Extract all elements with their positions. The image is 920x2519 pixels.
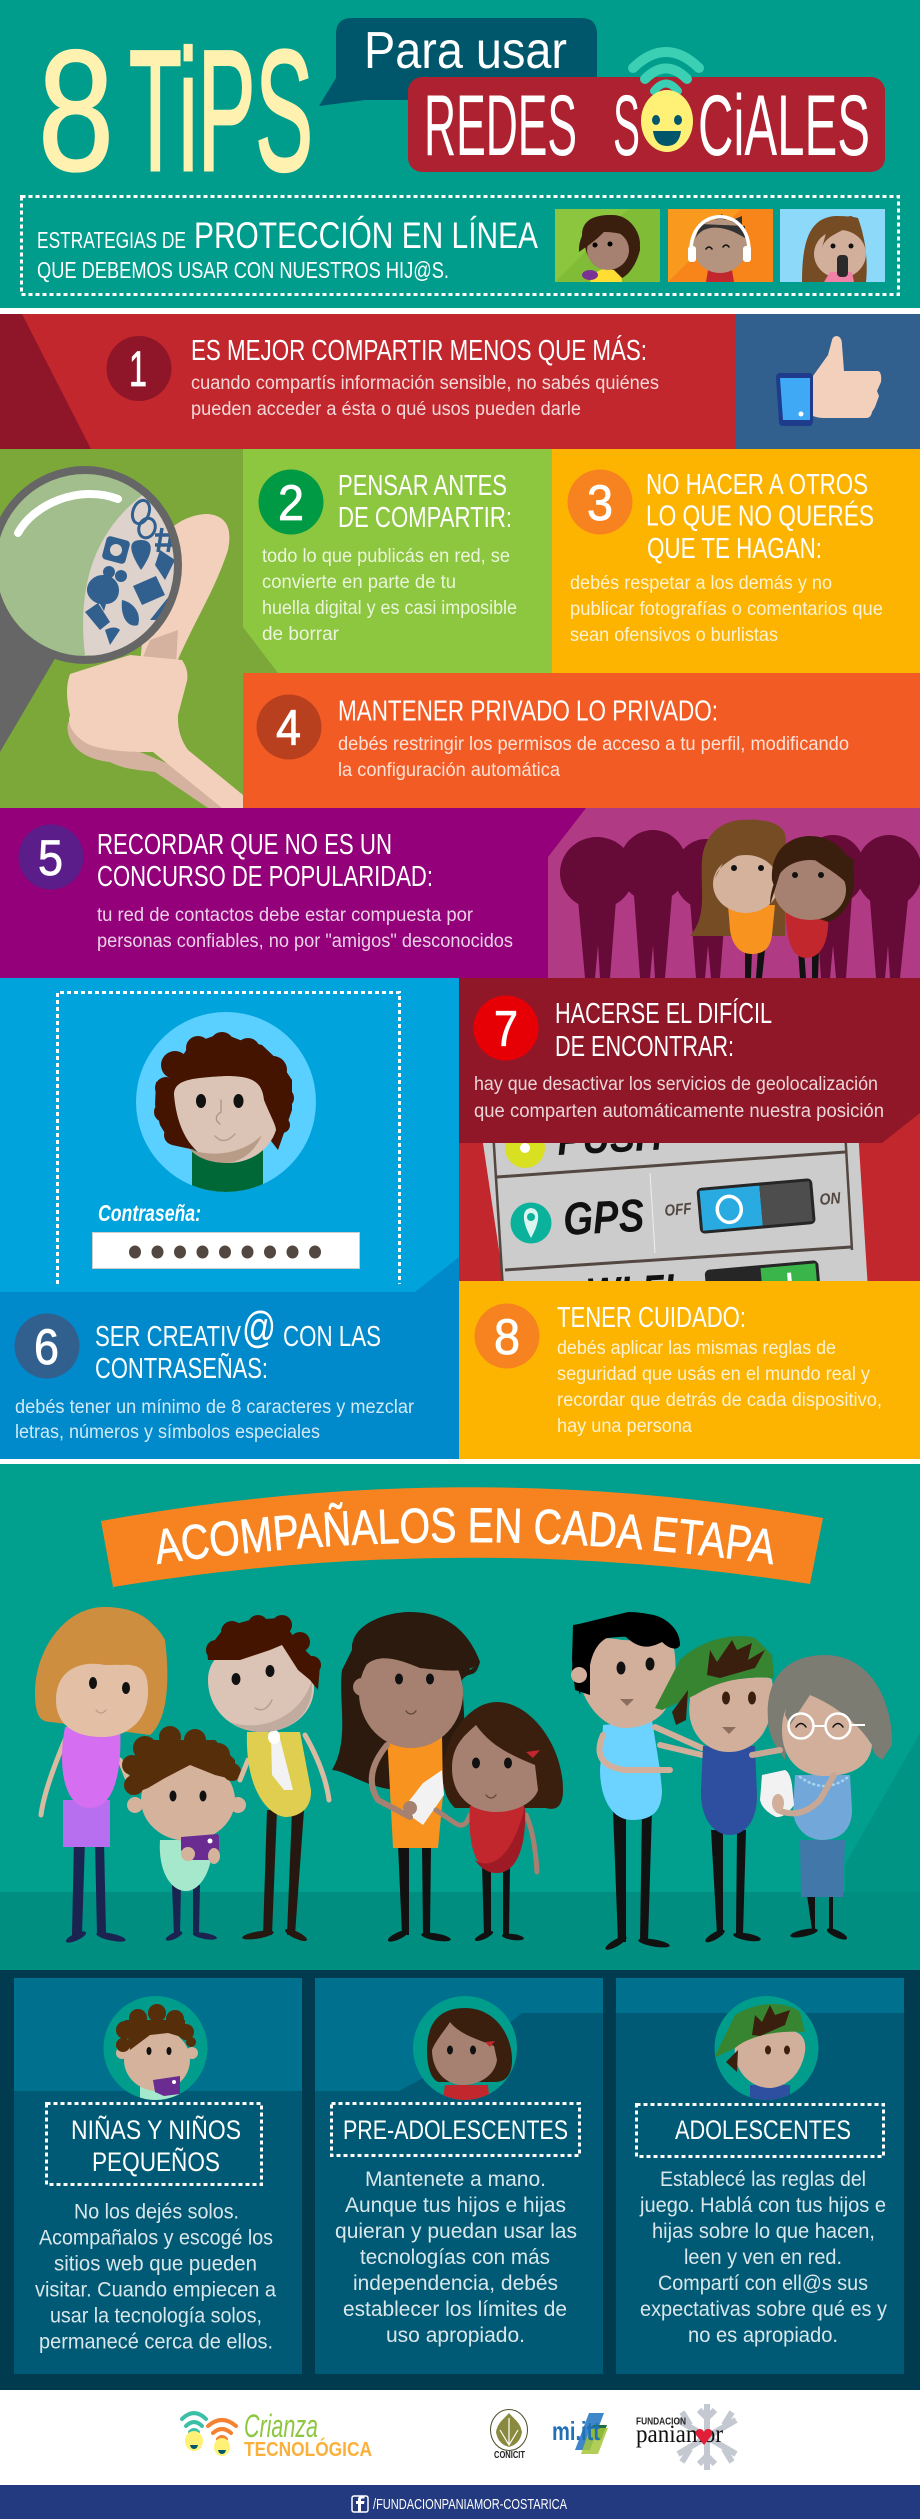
heading 7 bbox=[555, 997, 772, 1063]
heading 5: RECORDAR QUE NO ES UN bbox=[97, 829, 392, 861]
logo: conicit: CONICIT bbox=[494, 2450, 525, 2461]
card: pre-adolescentes bbox=[315, 1978, 603, 2374]
number 2: 2 bbox=[278, 475, 304, 531]
stage label box bbox=[46, 2104, 262, 2184]
illustration: settings device with GPS switch: PUSH bbox=[556, 1111, 664, 1165]
card text: leen y ven en red. bbox=[684, 2246, 842, 2269]
family illustration bbox=[35, 1607, 892, 1952]
card text: expectativas sobre qué es y bbox=[640, 2298, 887, 2321]
stage label box: ADOLESCENTES bbox=[675, 2115, 851, 2145]
facebook handle: /FUNDACIONPANIAMOR-COSTARICA bbox=[373, 2496, 567, 2513]
card text: Mantenete a mano. bbox=[365, 2168, 546, 2191]
icon: facebook bbox=[352, 2496, 368, 2512]
card text: visitar. Cuando empiecen a bbox=[35, 2278, 276, 2302]
heading 6: CONTRASEÑAS: bbox=[95, 1351, 268, 1385]
subtitle box bbox=[22, 196, 898, 294]
card text: juego. Hablá con tus hijos e bbox=[639, 2194, 886, 2217]
heading 5: CONCURSO DE POPULARIDAD: bbox=[97, 861, 433, 893]
heading 4: MANTENER PRIVADO LO PRIVADO: bbox=[338, 696, 718, 728]
tip 4 panel bbox=[243, 673, 920, 808]
card text: independencia, debés bbox=[353, 2272, 558, 2295]
text 3: sean ofensivos o burlistas bbox=[570, 625, 778, 646]
card: adolescentes bbox=[616, 1978, 904, 2374]
illustration: crowd silhouettes bbox=[560, 830, 920, 978]
photo: boy with headphones bbox=[668, 209, 773, 282]
heading 1: ES MEJOR COMPARTIR MENOS QUE MÁS: bbox=[191, 334, 647, 367]
card text bbox=[335, 2168, 577, 2347]
ages section background bbox=[0, 1970, 920, 2390]
text 2: huella digital y es casi imposible bbox=[262, 598, 517, 619]
toggle switch: on bbox=[704, 1260, 820, 1281]
footer bar bbox=[0, 2485, 920, 2519]
stage label box bbox=[636, 2104, 884, 2156]
card text: usar la tecnología solos, bbox=[50, 2304, 262, 2328]
avatar: girl bbox=[413, 1996, 517, 2105]
title: 8 tips: TiPS bbox=[129, 15, 313, 207]
text 3: publicar fotografías o comentarios que bbox=[570, 599, 883, 620]
speech bubble: para usar bbox=[319, 18, 597, 106]
stage section background bbox=[0, 1464, 920, 1970]
text 4: debés restringir los permisos de acceso a tu perfil, modificando bbox=[338, 734, 849, 755]
tip 3 panel bbox=[552, 449, 920, 673]
text 3: debés respetar a los demás y no bbox=[570, 573, 832, 594]
header panel bbox=[0, 0, 920, 308]
logo: crianza tecnológica: TECNOLÓGICA bbox=[244, 2437, 372, 2461]
figure: man in yellow shirt with tie bbox=[206, 1615, 329, 1943]
text 2: convierte en parte de tu bbox=[262, 572, 456, 593]
text 8: debés aplicar las mismas reglas de bbox=[557, 1338, 836, 1359]
avatar: child bbox=[104, 1996, 208, 2105]
logo: fundación paniamor bbox=[636, 2404, 736, 2470]
tip 1 panel bbox=[0, 314, 920, 449]
subtitle box: PROTECCIÓN EN LÍNEA bbox=[194, 215, 538, 256]
text 6 bbox=[15, 1397, 415, 1443]
text 5 bbox=[97, 905, 513, 952]
icons in lens bbox=[85, 498, 180, 645]
card text: permanecé cerca de ellos. bbox=[39, 2330, 273, 2354]
stage label box: PEQUEÑOS bbox=[92, 2146, 220, 2177]
number 4: 4 bbox=[276, 700, 301, 756]
number 7 bbox=[474, 996, 538, 1060]
text 1 bbox=[191, 373, 659, 420]
text 8 bbox=[557, 1338, 882, 1437]
title plate: redes sociales bbox=[408, 52, 885, 174]
text 8: hay una persona bbox=[557, 1416, 692, 1437]
logo: fundación paniamor: FUNDACION bbox=[636, 2416, 686, 2428]
card text: uso apropiado. bbox=[386, 2324, 525, 2347]
subtitle box: QUE DEBEMOS USAR CON NUESTROS HIJ@S. bbox=[37, 257, 449, 283]
stage label box bbox=[332, 2104, 580, 2156]
banner: acompañalos en cada etapa: ACOMPAÑALOS EN CADA ETAPA bbox=[156, 1502, 774, 1564]
heading 8: TENER CUIDADO: bbox=[557, 1302, 746, 1334]
text 7 bbox=[474, 1074, 884, 1122]
logo: micitt bbox=[552, 2413, 608, 2454]
text 3 bbox=[570, 573, 883, 646]
illustration: settings device with GPS switch: OFF bbox=[664, 1201, 693, 1220]
number 7: 7 bbox=[494, 1001, 518, 1057]
tip 2 panel bbox=[243, 449, 552, 673]
tip 6 panel bbox=[0, 978, 459, 1459]
logo: conicit bbox=[490, 2410, 528, 2461]
illustration: two girls bbox=[690, 820, 854, 978]
number 1: 1 bbox=[129, 341, 147, 397]
illustration: settings device with GPS switch: ON bbox=[819, 1190, 842, 1209]
title plate: redes sociales: REDES bbox=[424, 78, 577, 174]
card text: sitios web que pueden bbox=[54, 2252, 257, 2276]
logo: micitt: mi.itt bbox=[552, 2416, 600, 2446]
figure: woman in orange with tablet bbox=[332, 1612, 480, 1944]
text 7: que comparten automáticamente nuestra posición bbox=[474, 1101, 884, 1122]
heading 5 bbox=[97, 829, 433, 893]
illustration: settings device with GPS switch: GPS bbox=[562, 1189, 646, 1245]
title plate: redes sociales: S bbox=[613, 78, 640, 174]
logo: crianza tecnológica bbox=[182, 2408, 372, 2461]
figure: woman in pink bbox=[35, 1607, 167, 1945]
card text bbox=[639, 2168, 887, 2347]
card: niñas y niños pequeños bbox=[14, 1978, 302, 2374]
figure: man in light blue bbox=[571, 1612, 680, 1952]
number 3: 3 bbox=[587, 475, 613, 531]
tip 5 panel bbox=[0, 808, 920, 978]
figure: boy with green cap bbox=[655, 1636, 774, 1945]
number 3 bbox=[568, 470, 632, 534]
card text: Establecé las reglas del bbox=[660, 2168, 866, 2191]
photo: girl with phone bbox=[780, 209, 885, 282]
text 1: cuando compartís información sensible, no sabés quiénes bbox=[191, 373, 659, 394]
card text: tecnologías con más bbox=[360, 2246, 550, 2269]
text 2 bbox=[262, 546, 517, 645]
icon: GPS pin bbox=[510, 1202, 552, 1244]
stage label box: NIÑAS Y NIÑOS bbox=[71, 2114, 241, 2145]
avatar: curly boy bbox=[136, 1012, 316, 1195]
number 6 bbox=[14, 1314, 80, 1378]
photo: girl with toy bbox=[555, 209, 660, 282]
text 2: de borrar bbox=[262, 624, 340, 645]
number 2 bbox=[258, 470, 324, 534]
text 6: debés tener un mínimo de 8 caracteres y mezclar bbox=[15, 1397, 415, 1418]
left illustration: magnifier over fingerprint bbox=[0, 449, 280, 808]
text 5: personas confiables, no por "amigos" desconocidos bbox=[97, 931, 513, 952]
banner: acompañalos en cada etapa bbox=[101, 1487, 823, 1587]
password field bbox=[92, 1232, 360, 1268]
heading 2: PENSAR ANTES bbox=[338, 470, 507, 502]
text 8: seguridad que usás en el mundo real y bbox=[557, 1364, 870, 1385]
heading 2: DE COMPARTIR: bbox=[338, 502, 512, 534]
card text: Compartí con ell@s sus bbox=[658, 2272, 868, 2295]
card text: establecer los límites de bbox=[343, 2298, 567, 2321]
card text bbox=[35, 2200, 276, 2354]
text 8: recordar que detrás de cada dispositivo, bbox=[557, 1390, 882, 1411]
logo: crianza tecnológica: Crianza bbox=[244, 2408, 318, 2444]
text 2: todo lo que publicás en red, se bbox=[262, 546, 510, 567]
heading 6 bbox=[95, 1303, 381, 1385]
text 5: tu red de contactos debe estar compuesta por bbox=[97, 905, 474, 926]
number 5: 5 bbox=[38, 830, 63, 886]
card text: No los dejés solos. bbox=[74, 2200, 239, 2224]
avatar: boy with cap bbox=[714, 1996, 818, 2105]
number 4 bbox=[256, 694, 322, 760]
title: 8 tips bbox=[38, 15, 313, 207]
illustration: settings device with GPS switch: WI-FI bbox=[585, 1265, 676, 1319]
tip 7 panel bbox=[459, 978, 920, 1281]
tip 8 panel bbox=[459, 1281, 920, 1459]
card text: Aunque tus hijos e hijas bbox=[345, 2194, 566, 2217]
toggle switch: off bbox=[696, 1178, 816, 1234]
subtitle box: ESTRATEGIAS DE bbox=[37, 227, 186, 253]
figure: grandmother with glasses bbox=[752, 1655, 892, 1942]
text 4: la configuración automática bbox=[338, 760, 560, 781]
number 8 bbox=[474, 1304, 540, 1368]
title: 8 tips: 8 bbox=[38, 15, 114, 207]
number 1 bbox=[106, 336, 172, 401]
heading 7: HACERSE EL DIFÍCIL bbox=[555, 997, 772, 1030]
number 8: 8 bbox=[494, 1309, 520, 1365]
text 6: letras, números y símbolos especiales bbox=[15, 1422, 320, 1443]
speech bubble: para usar: Para usar bbox=[364, 22, 567, 80]
heading 6: @ bbox=[242, 1303, 276, 1352]
text 7: hay que desactivar los servicios de geolocalización bbox=[474, 1074, 878, 1095]
heading 6: SER CREATIV bbox=[95, 1321, 242, 1353]
password label: Contraseña: bbox=[98, 1200, 201, 1226]
heading 7: DE ENCONTRAR: bbox=[555, 1031, 734, 1063]
number 5 bbox=[18, 824, 84, 890]
card text: Acompañalos y escogé los bbox=[39, 2226, 273, 2250]
figure: small child with purple phone bbox=[122, 1726, 246, 1943]
heading 3 bbox=[646, 469, 874, 565]
card text: quieran y puedan usar las bbox=[335, 2220, 577, 2243]
figure: girl in red bbox=[436, 1702, 563, 1943]
icon: thumbs up with phone bbox=[776, 336, 881, 426]
card text: no es apropiado. bbox=[688, 2324, 838, 2347]
heading 6: CON LAS bbox=[283, 1321, 381, 1353]
stage label box: PRE-ADOLESCENTES bbox=[343, 2115, 568, 2145]
icon: wifi smiley bbox=[633, 52, 699, 152]
heading 2 bbox=[338, 470, 512, 534]
logo: fundación paniamor: paniamor bbox=[636, 2421, 724, 2448]
text 4 bbox=[338, 734, 849, 781]
illustration: settings device with GPS switch bbox=[482, 1143, 868, 1281]
heading 3: QUE TE HAGAN: bbox=[647, 533, 822, 565]
text 1: pueden acceder a ésta o qué usos pueden darle bbox=[191, 399, 581, 420]
number 6: 6 bbox=[34, 1319, 59, 1375]
card text: hijas sobre lo que hacen, bbox=[652, 2220, 875, 2243]
